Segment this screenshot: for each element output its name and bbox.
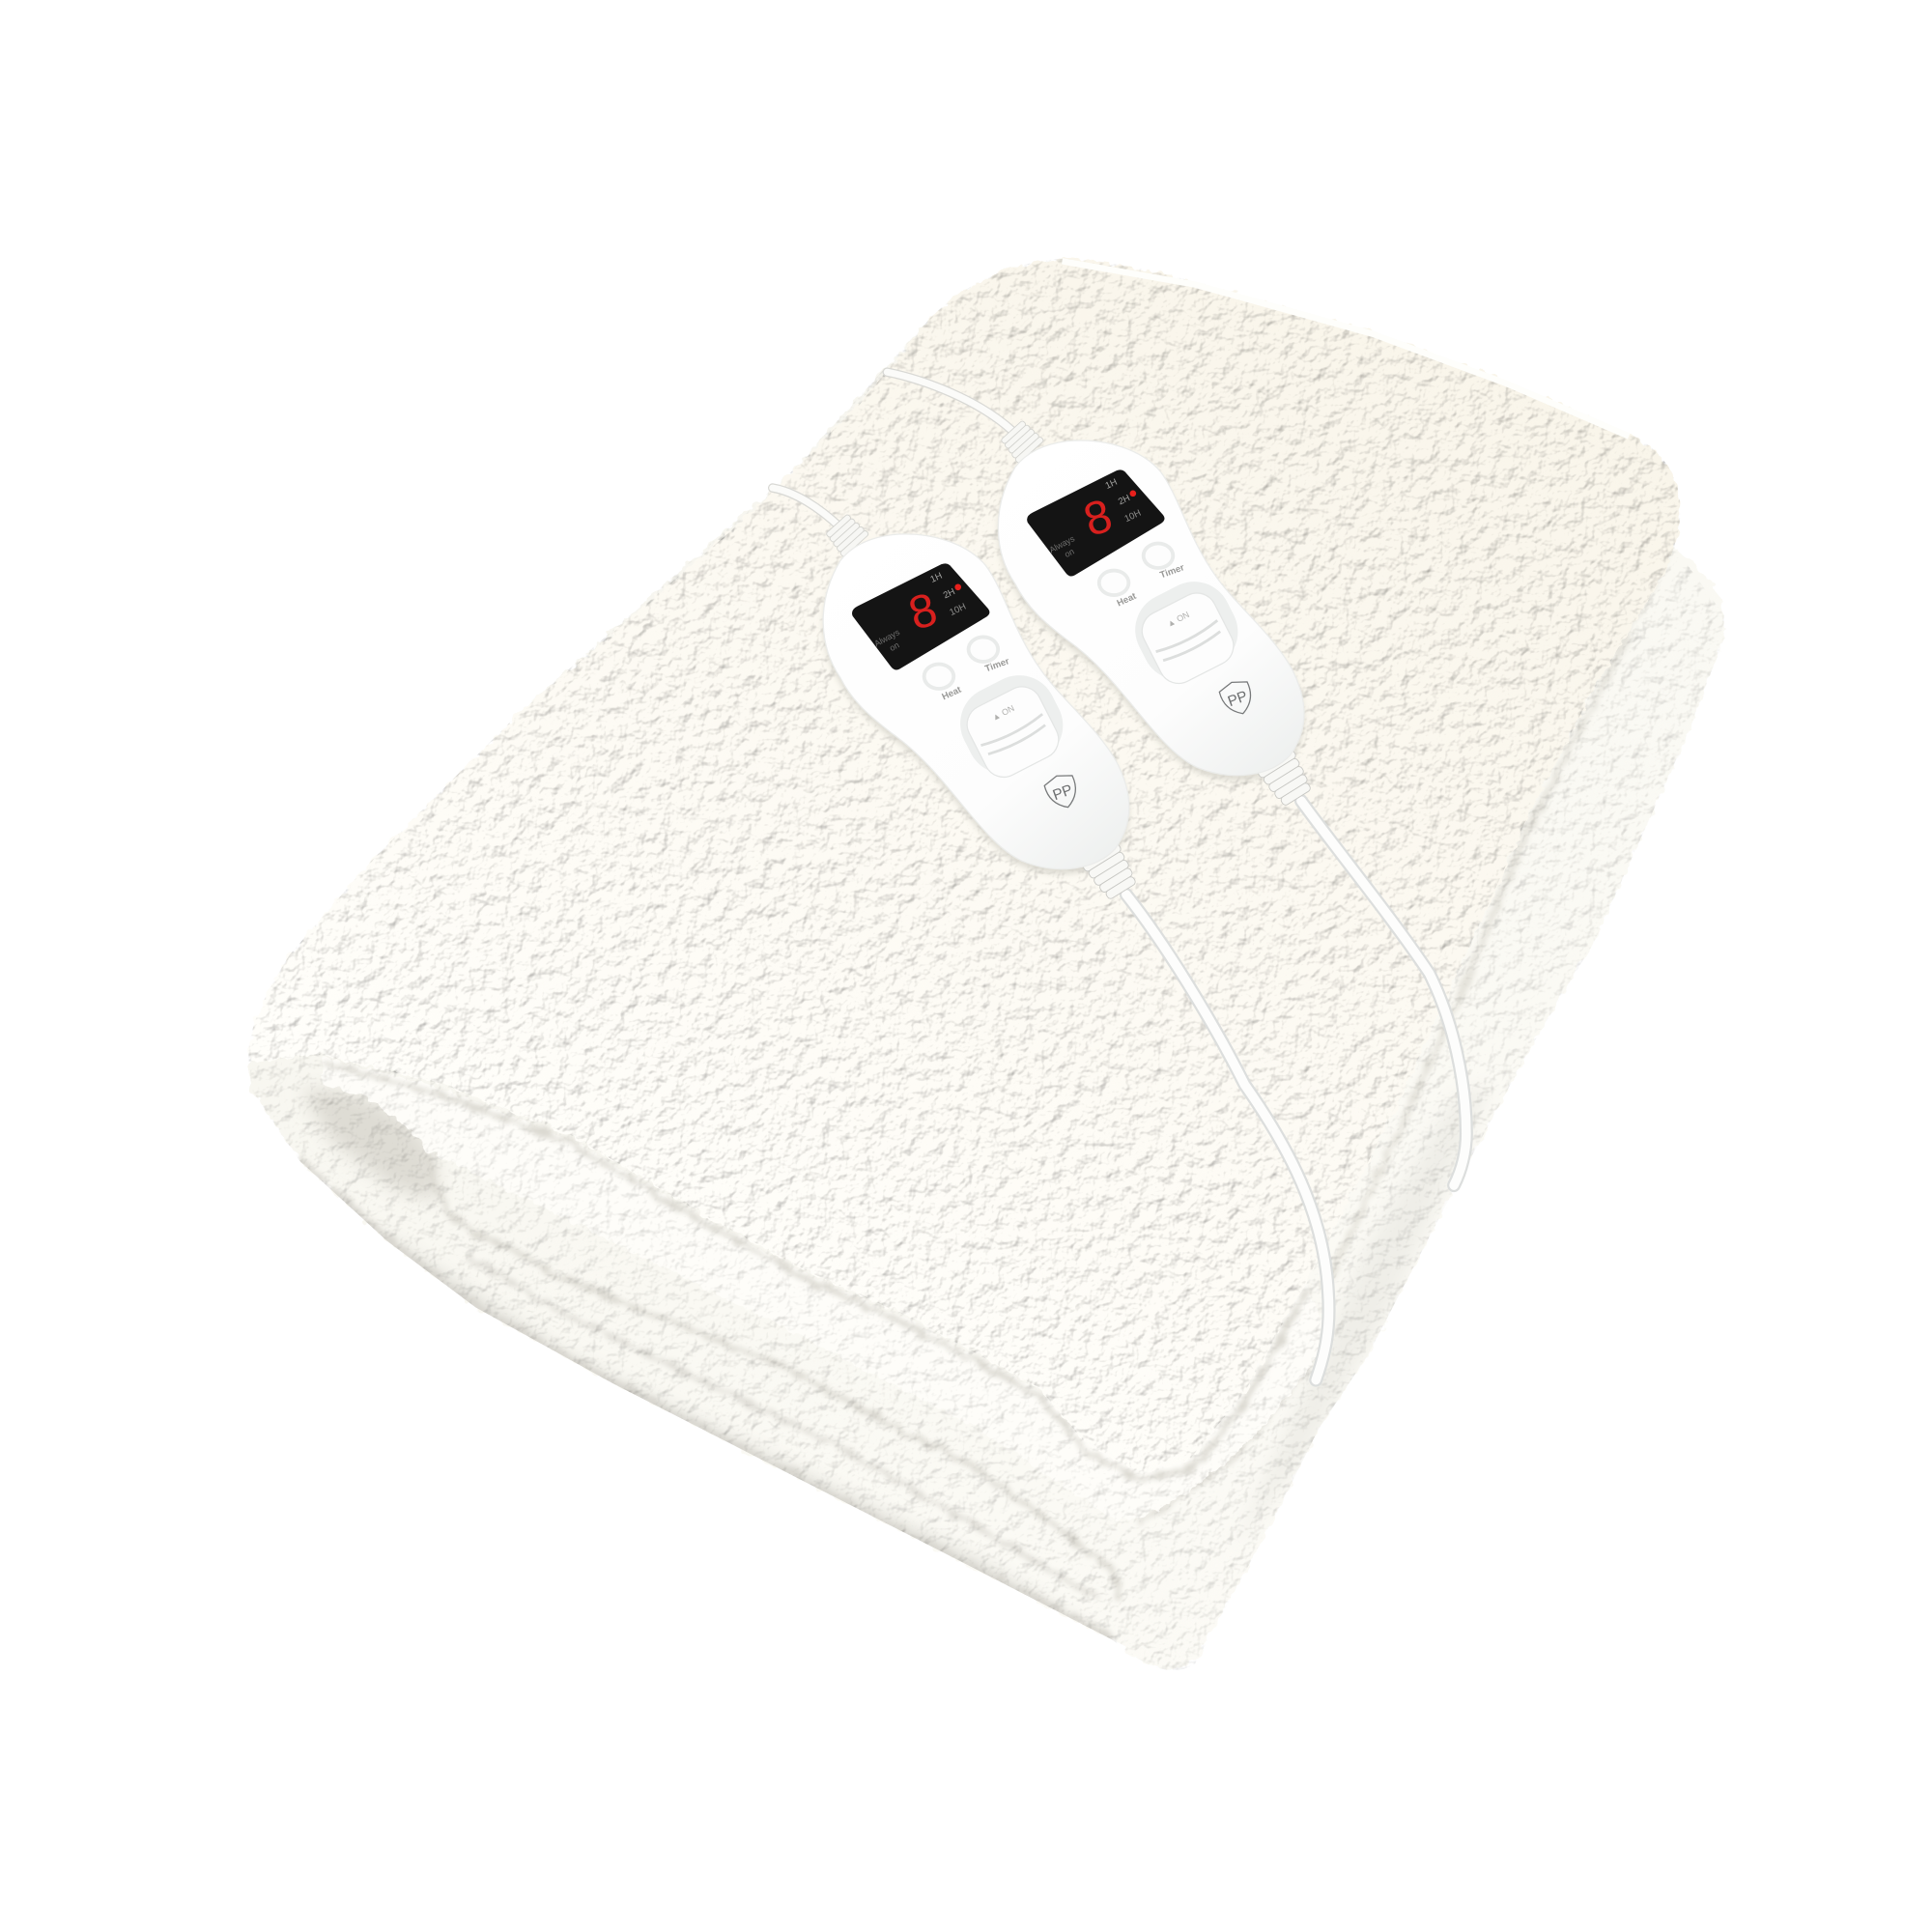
- slider recess: [1122, 569, 1251, 693]
- product illustration: folded fleece electric blanket with two controllers: [247, 257, 1726, 1670]
- button labels: Timer: [983, 656, 1011, 674]
- strain relief: top: [824, 512, 869, 557]
- wire: right controller lower ribbon: [1301, 801, 1466, 1185]
- controller body: [998, 440, 1304, 776]
- button labels: Heat: [1116, 590, 1139, 609]
- display always-on label: on: [888, 639, 901, 653]
- button labels: Heat: [941, 684, 964, 702]
- display always-on label: Always: [1047, 533, 1077, 554]
- button labels: [941, 656, 1011, 702]
- wires and ribbons: [773, 372, 1466, 1380]
- display timer labels: 2H: [942, 586, 957, 601]
- controller shadow: [823, 539, 1129, 874]
- display always-on label: Always: [872, 627, 901, 648]
- blanket: folded fleece body: [234, 246, 1737, 1688]
- timer LED: [1130, 491, 1136, 497]
- controller body: [823, 534, 1129, 869]
- slider switch: [960, 680, 1065, 783]
- controller: right handset: [998, 418, 1317, 810]
- timer LED: [954, 583, 961, 590]
- brand shield logo: [1217, 677, 1257, 719]
- slider ON label: ▲ ON: [990, 703, 1016, 723]
- slider recess: [948, 663, 1075, 786]
- blanket: top hem highlight: [1062, 261, 1629, 437]
- controller: left handset: [823, 512, 1142, 903]
- brand shield logo: [1042, 771, 1082, 812]
- LCD display panel: [852, 563, 989, 669]
- blanket: white fold band under top layer: [323, 1057, 1328, 1520]
- display timer labels: 1H: [1104, 477, 1119, 492]
- heat button: [923, 663, 955, 691]
- brand shield logo: PP: [1051, 781, 1075, 804]
- display timer labels: 10H: [1122, 508, 1143, 525]
- strain relief: bottom: [1246, 733, 1317, 810]
- blanket: shaggy top surface: [248, 259, 1680, 1472]
- blanket: fleece grain on lower layers: [234, 246, 1737, 1688]
- slider ON label: ▲ ON: [1165, 610, 1191, 629]
- display timer labels: [929, 571, 968, 618]
- display timer labels: 2H: [1117, 493, 1132, 507]
- blanket: side fold shading and roll hollow: [299, 557, 1665, 1640]
- display always-on label: on: [1063, 547, 1076, 559]
- blanket: fleece texture on top surface: [234, 246, 1737, 1491]
- wire: left controller top cord: [773, 488, 840, 527]
- strain relief: top: [999, 418, 1044, 464]
- wire: right controller top cord: [887, 372, 1012, 431]
- blanket: lower folded layers silhouette: [249, 259, 1723, 1668]
- heat button: [1097, 569, 1130, 597]
- strain relief: bottom: [1071, 827, 1142, 903]
- blanket: shadow under top layer edge: [323, 1062, 1309, 1481]
- brand shield logo: PP: [1226, 688, 1250, 710]
- wire: left controller lower ribbon: [1126, 895, 1329, 1380]
- display digit: 8: [903, 582, 943, 640]
- timer button: [1142, 542, 1175, 570]
- display timer labels: 1H: [929, 571, 944, 585]
- LCD display panel: [1027, 469, 1165, 577]
- display timer labels: [1104, 477, 1143, 525]
- slider switch: [1135, 586, 1240, 690]
- display timer labels: 10H: [948, 602, 968, 618]
- display digit: 8: [1078, 490, 1118, 547]
- controller shadow: [998, 445, 1304, 781]
- button labels: [1116, 562, 1186, 609]
- button labels: Timer: [1158, 562, 1186, 581]
- timer button: [967, 636, 1000, 664]
